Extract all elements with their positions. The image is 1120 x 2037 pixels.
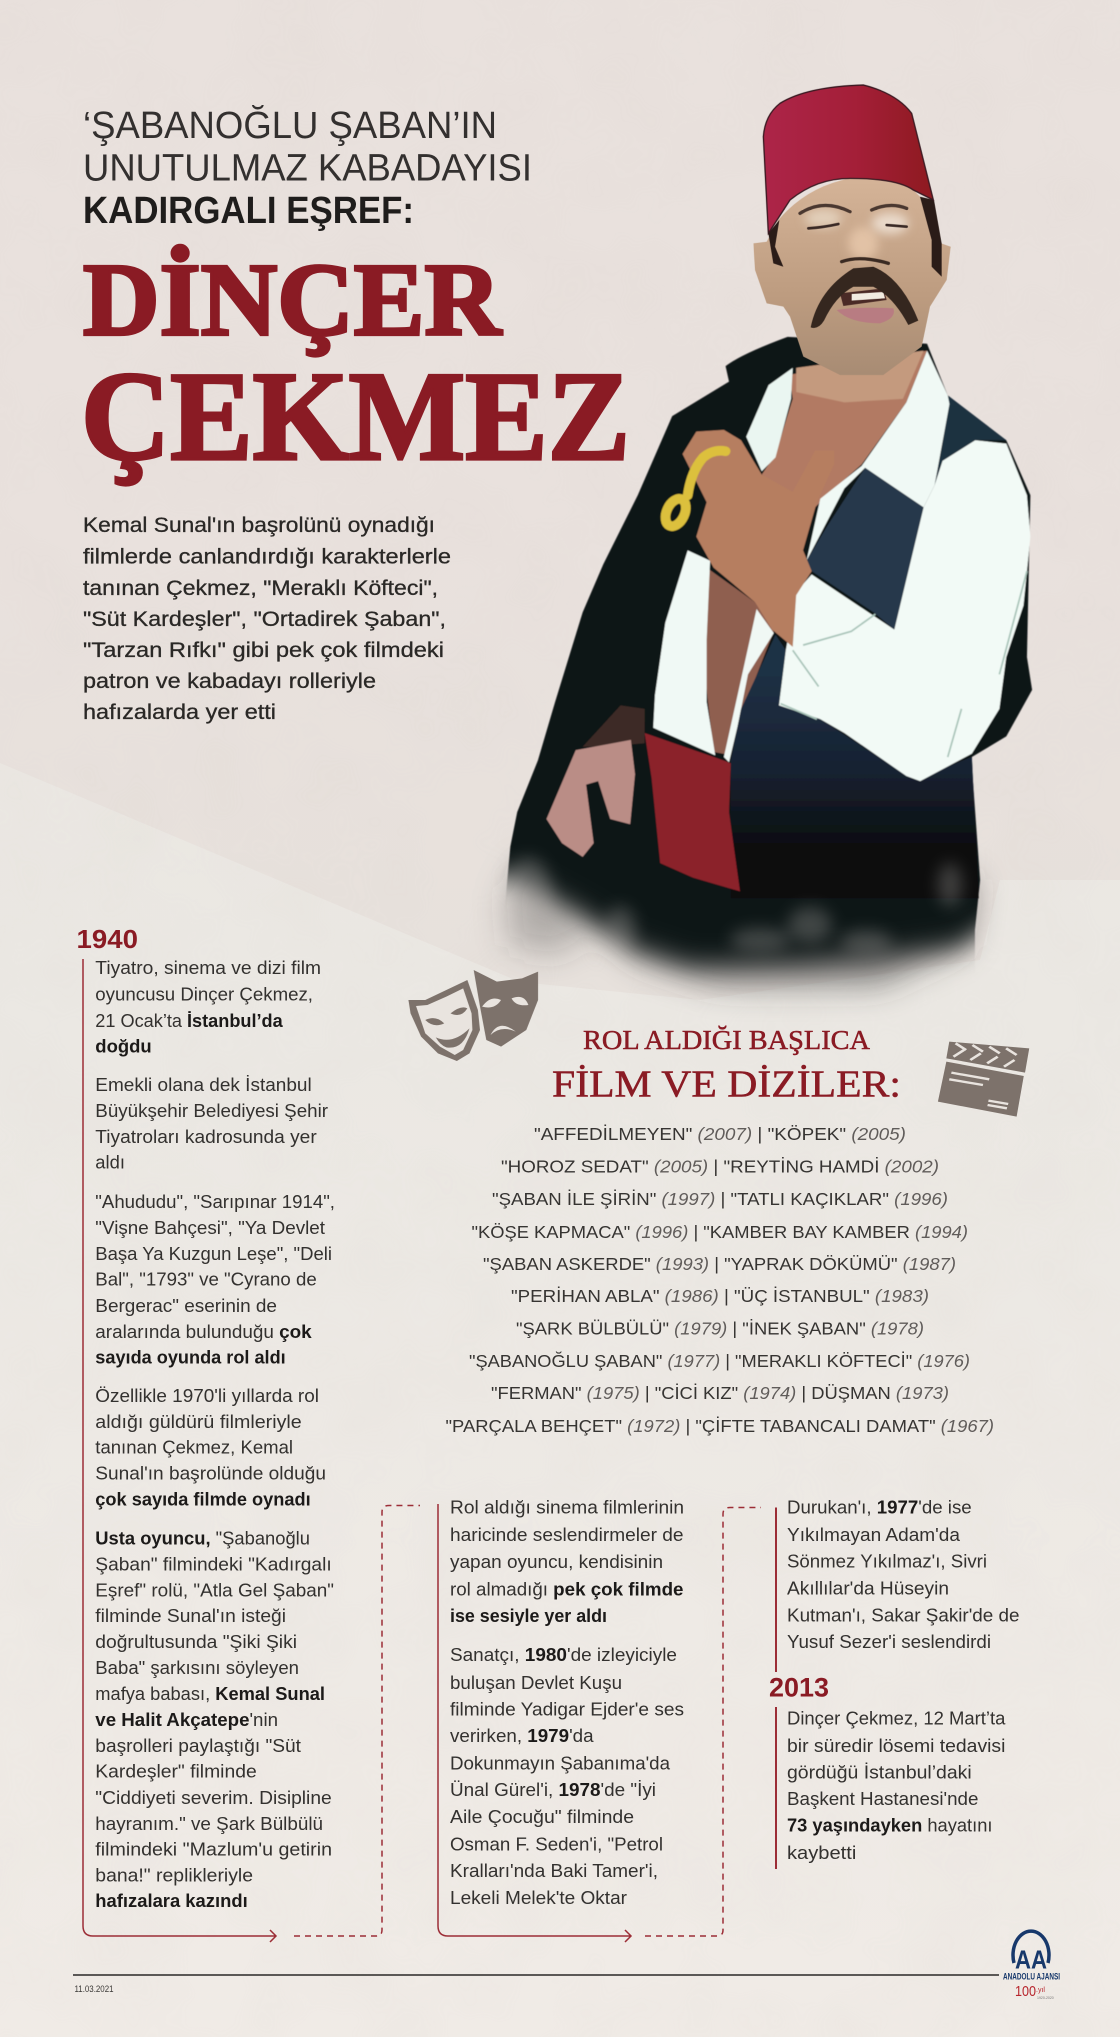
logo: Anadolu Ajansi: 100 [1015,1983,1036,2000]
abdomen skin [705,568,774,754]
biography column 2: haricinde seslendirmeler de [450,1525,684,1545]
biography column 1: tanınan Çekmez, Kemal [95,1438,293,1458]
biography column 1: aldı [95,1153,125,1173]
section heading: ROL ALDIĞI BAŞLICA [583,1025,871,1055]
intro text [83,514,451,724]
face details [800,205,908,263]
icon: clapperboard [938,1042,1029,1117]
biography column 1: Eşref" rolü, "Atla Gel Şaban" [95,1580,334,1600]
biography column 1: hafızalara kazındı [95,1891,248,1911]
intro text: patron ve kabadayı rolleriyle [83,670,376,693]
portrait figure [503,85,1032,1019]
sleeve creases [781,571,1027,757]
cape [503,337,1032,1019]
fog under figure [505,860,975,985]
gold chain [661,451,726,529]
biography column 2: rol almadığı pek çok filmde [450,1580,684,1600]
logo: Anadolu Ajansi: AA [1015,1944,1047,1974]
lower left hand [546,740,635,857]
biography 2013 text: bir süredir lösemi tedavisi [787,1736,1005,1756]
logo: Anadolu Ajansi: 1920-2020 [1037,1996,1054,2000]
shirt left panel [653,550,715,755]
vest panel [807,468,924,630]
biography column 1: aldığı güldürü filmleriyle [95,1412,302,1432]
biography column 2: Rol aldığı sinema filmlerinin [450,1498,684,1518]
biography column 1: "Vişne Bahçesi", "Ya Devlet [95,1218,325,1238]
biography column 2: Lekeli Melek'te Oktar [450,1888,627,1908]
biography column 2 [450,1498,684,1908]
biography 2013 text: 73 yaşındayken hayatını [787,1816,992,1836]
film list: "ŞARK BÜLBÜLÜ" (1979) | "İNEK ŞABAN" (1978) [516,1319,924,1339]
logo: Anadolu Ajansi: .yıl [1036,1987,1045,1994]
intro text: "Tarzan Rıfkı" gibi pek çok filmdeki [83,639,444,662]
biography column 1: 21 Ocak’ta İstanbul’da [95,1011,284,1031]
film list [446,1124,994,1436]
name heading [81,242,630,487]
tragic mask [474,970,538,1047]
intro text: hafızalarda yer etti [83,701,276,724]
lower vest [731,635,979,898]
biography column 1: Büyükşehir Belediyesi Şehir [95,1101,328,1121]
sash [645,733,740,891]
film list: "ŞABANOĞLU ŞABAN" (1977) | "MERAKLI KÖFTECİ" (1976) [469,1350,970,1371]
biography column 1: doğrultusunda "Şiki Şiki [95,1632,297,1652]
film list: "PARÇALA BEHÇET" (1972) | "ÇİFTE TABANCALI DAMAT" (1967) [446,1416,994,1436]
biography column 1: "Ciddiyeti severim. Disipline [95,1788,332,1808]
biography column 1: Kardeşler" filminde [95,1762,257,1782]
biography 2013 text: kaybetti [787,1843,856,1863]
biography column 1: başrolleri paylaştığı "Süt [95,1736,301,1756]
biography column 1: Şaban" filmindeki "Kadırgalı [95,1555,332,1575]
icon: theatre masks [408,970,538,1061]
biography 2013 text: Dinçer Çekmez, 12 Mart’ta [787,1708,1006,1728]
section heading: FİLM VE DİZİLER: [552,1064,901,1106]
head [753,178,951,375]
biography column 2: Aile Çocuğu" filminde [450,1807,634,1827]
intro text: "Süt Kardeşler", "Ortadirek Şaban", [83,608,446,631]
biography column 2: filminde Yadigar Ejder'e ses [450,1700,684,1720]
film list: "ŞABAN İLE ŞİRİN" (1997) | "TATLI KAÇIKLAR" (1996) [492,1189,948,1209]
biography 2013 text: Başkent Hastanesi'nde [787,1789,978,1809]
intro text: tanınan Çekmez, "Meraklı Köfteci", [83,577,438,600]
biography column 3: Kutman'ı, Sakar Şakir'de de [787,1605,1020,1625]
hand [682,429,816,647]
date: 11.03.2021 [74,1984,114,1995]
biography column 1: oyuncusu Dinçer Çekmez, [95,985,313,1005]
year 2013: 2013 [769,1673,829,1703]
biography column 2: buluşan Devlet Kuşu [450,1673,622,1693]
vest shoulder [936,396,1006,477]
biography column 1: hayranım." ve Şark Bülbülü [95,1814,323,1834]
biography column 3: Durukan'ı, 1977'de ise [787,1498,972,1518]
biography column 1: filminde Sunal'ın isteği [95,1606,286,1626]
biography column 1: Özellikle 1970'li yıllarda rol [95,1386,319,1406]
lower mottling [504,857,962,954]
biography column 3: Yıkılmayan Adam'da [787,1525,961,1545]
biography column 2: Ünal Gürel'i, 1978'de "İyi [450,1780,656,1800]
logo: Anadolu Ajansi: ANADOLU AJANSI [1003,1972,1060,1982]
biography column 2: ise sesiyle yer aldı [450,1606,607,1626]
timeline connectors [83,959,776,1942]
biography column 1: Başa Ya Kuzgun Leşe", "Deli [95,1244,332,1264]
biography column 1: doğdu [95,1036,152,1056]
biography column 2: Osman F. Seden'i, "Petrol [450,1834,663,1854]
biography column 1: bana!" replikleriyle [95,1865,253,1885]
biography column 2: Dokunmayın Şabanıma'da [450,1754,671,1774]
biography column 2: Kralları'nda Baki Tamer'i, [450,1861,658,1881]
biography column 1: Usta oyuncu, "Şabanoğlu [95,1529,310,1549]
biography column 1: "Ahududu", "Sarıpınar 1914", [95,1192,335,1212]
arm shadow [583,705,645,747]
mustache [811,267,918,328]
biography 2013 text [787,1708,1006,1863]
biography column 3: Yusuf Sezer'i seslendirdi [787,1632,991,1652]
hair [768,197,942,277]
logo: Anadolu Ajansi [1003,1931,1060,2000]
film list: "FERMAN" (1975) | "CİCİ KIZ" (1974) | DÜŞMAN (1973) [491,1383,949,1403]
title: UNUTULMAZ KABADAYISI [83,148,532,190]
biography column 2: yapan oyuncu, kendisinin [450,1552,663,1572]
title: ‘ŞABANOĞLU ŞABAN’IN [83,103,497,147]
intro text: Kemal Sunal'ın başrolünü oynadığı [83,514,435,537]
intro text: filmlerde canlandırdığı karakterlerle [83,546,451,568]
film list: "HOROZ SEDAT" (2005) | "REYTİNG HAMDİ (2002) [501,1157,939,1177]
biography column 1: filmindeki "Mazlum'u getirin [95,1840,332,1860]
biography column 1: çok sayıda filmde oynadı [95,1490,311,1510]
biography column 1: ve Halit Akçatepe'nin [95,1710,278,1730]
biography column 1 [95,958,335,1911]
biography column 1: Tiyatroları kadrosunda yer [95,1127,317,1147]
name heading: DİNÇER [83,242,503,358]
shirt right collar [807,351,949,561]
sleeve [779,440,1030,781]
mouth [837,288,894,323]
footer rule [73,1974,999,1976]
film list: "AFFEDİLMEYEN" (2007) | "KÖPEK" (2005) [534,1124,906,1144]
name heading: ÇEKMEZ [81,347,630,487]
shirt center strip [724,609,774,762]
comic mask [408,980,480,1061]
title [83,103,532,232]
biography column 1: aralarında bulunduğu çok [95,1322,313,1342]
shirt left collar [746,368,793,471]
film list: "PERİHAN ABLA" (1986) | "ÜÇ İSTANBUL" (1983) [511,1286,929,1306]
year 1940: 1940 [76,924,138,954]
biography column 1: Sunal'ın başrolünde olduğu [95,1464,326,1484]
neck and chest skin [762,351,927,513]
biography 2013 text: gördüğü İstanbul’daki [787,1762,972,1782]
biography column 3: Sönmez Yıkılmaz'ı, Sivri [787,1552,987,1572]
section heading [552,1025,901,1106]
biography column 3 [787,1498,1020,1652]
biography column 2: verirken, 1979'da [450,1726,595,1746]
fez [763,85,933,233]
biography column 1: sayıda oyunda rol aldı [95,1348,286,1368]
biography column 1: Baba" şarkısını söyleyen [95,1658,299,1678]
film list: "KÖŞE KAPMACA" (1996) | "KAMBER BAY KAMBER (1994) [472,1222,968,1242]
biography column 1: Tiyatro, sinema ve dizi film [95,958,321,978]
biography column 3: Akıllılar'da Hüseyin [787,1579,949,1599]
biography column 2: Sanatçı, 1980'de izleyiciyle [450,1645,677,1665]
biography column 1: Bergerac" eserinin de [95,1296,277,1316]
biography column 1: mafya babası, Kemal Sunal [95,1684,325,1704]
film list: "ŞABAN ASKERDE" (1993) | "YAPRAK DÖKÜMÜ" (1987) [483,1254,956,1274]
biography column 1: Bal", "1793" ve "Cyrano de [95,1270,317,1290]
title: KADIRGALI EŞREF: [83,190,414,232]
biography column 1: Emekli olana dek İstanbul [95,1075,312,1095]
